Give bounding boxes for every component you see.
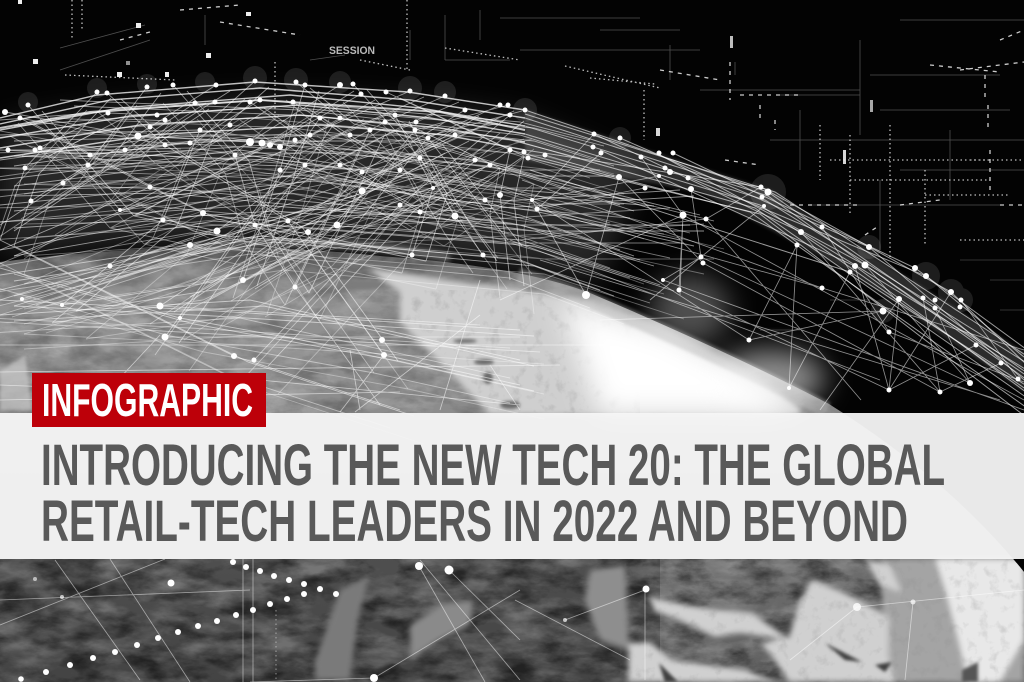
- badge: INFOGRAPHIC: [32, 373, 266, 427]
- lower: right side tone: [880, 559, 1024, 682]
- heading: [41, 433, 945, 554]
- network: left arc strands: [0, 82, 525, 158]
- haze: lines glow under arc: [0, 98, 640, 280]
- texture: lower clouds: [0, 559, 1024, 682]
- title band: translucent white strip: [0, 413, 1024, 559]
- node dots: right: [522, 108, 1020, 394]
- node halos: [18, 66, 973, 323]
- atmosphere: gray band along limb: [518, 276, 827, 410]
- lower: dark channels: [659, 643, 978, 682]
- data label: session readout: SESSION: [329, 45, 375, 57]
- atmosphere: left bright streak: [180, 243, 450, 258]
- texture: upper dark sea: [0, 248, 842, 413]
- data pattern: small squares: [18, 0, 873, 164]
- texture: lower dark base: [0, 559, 900, 682]
- network: dense left web: [0, 81, 724, 444]
- node dots: bottom chain: [18, 559, 915, 682]
- lower: bright land masses: [315, 559, 1024, 682]
- bundle body tint: [525, 110, 1024, 392]
- texture: continent speckle: [405, 290, 579, 413]
- network: arc strand bundle: [510, 110, 1024, 420]
- data pattern: faint technical marks in the sky: [60, 0, 1024, 330]
- badge: INFOGRAPHIC: INFOGRAPHIC: [42, 374, 253, 426]
- land: left coast: [0, 355, 32, 410]
- shading: lower left darkening: [0, 559, 660, 682]
- land: dark inland seas: [336, 280, 520, 409]
- node dots: dense left: [2, 78, 512, 362]
- atmosphere: faint plume: [650, 275, 730, 345]
- land: bright limb: [560, 300, 800, 415]
- atmosphere: glow beyond limb: [715, 350, 825, 406]
- earth: globe surface with cloud texture: [0, 230, 1024, 682]
- land: sunlit continent: [367, 268, 800, 415]
- texture: lower land speckle: [620, 559, 1024, 682]
- texture: upper clouds: [0, 248, 561, 413]
